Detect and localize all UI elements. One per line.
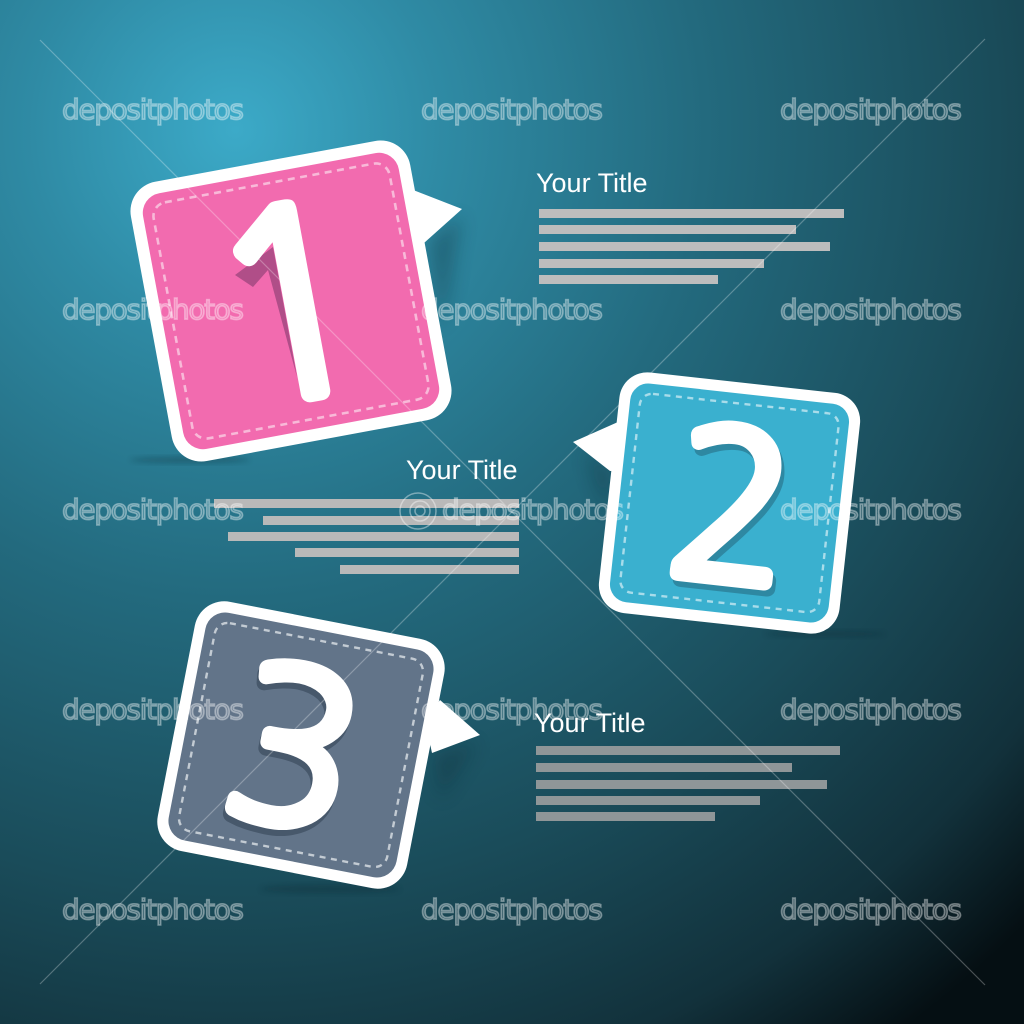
watermark grid: depositphotos [62,693,244,726]
text lines 3 [536,746,840,821]
watermark grid: depositphotos [62,293,244,326]
number 3: 3 [210,633,377,866]
title 3: Your Title [534,708,646,738]
bubble 2 body [596,369,863,637]
watermark grid: depositphotos [780,893,962,926]
text block 2 [214,455,519,574]
watermark grid: depositphotos [62,493,244,526]
number 2: 2 [659,399,805,617]
card 2: blue speech bubble [573,369,863,637]
number 1 shadow [235,247,297,377]
watermark grid: depositphotos [780,93,962,126]
watermark grid: depositphotos [421,293,603,326]
text lines 2 [214,499,519,574]
watermark grid: depositphotos [421,93,603,126]
watermark grid: depositphotos [442,493,624,526]
ground shadows under cards [130,215,885,893]
watermark grid: depositphotos [780,293,962,326]
watermark grid: depositphotos [780,493,962,526]
watermark grid: depositphotos [421,693,603,726]
bubble 3 body [152,596,450,894]
number 2 shadow: 2 [662,405,808,623]
number 3 shadow: 3 [208,639,375,872]
tail 2 [573,422,630,471]
bubble 1 body [126,136,456,466]
text block 3 [534,708,840,821]
watermark grid: depositphotos [780,693,962,726]
title 2: Your Title [406,455,518,485]
title 1: Your Title [536,168,648,198]
card 1: pink speech bubble [126,136,462,466]
text block 1 [536,168,844,284]
tail 3 [425,700,480,753]
card 3: slate speech bubble [152,596,480,894]
watermark grid [62,93,962,926]
icon: watermark camera logo [400,493,436,529]
text lines 1 [539,209,844,284]
watermark grid: depositphotos [421,893,603,926]
watermark grid: depositphotos [62,893,244,926]
watermark grid: depositphotos [62,93,244,126]
tail 1 [400,188,462,243]
number 1: 1 [191,165,392,448]
